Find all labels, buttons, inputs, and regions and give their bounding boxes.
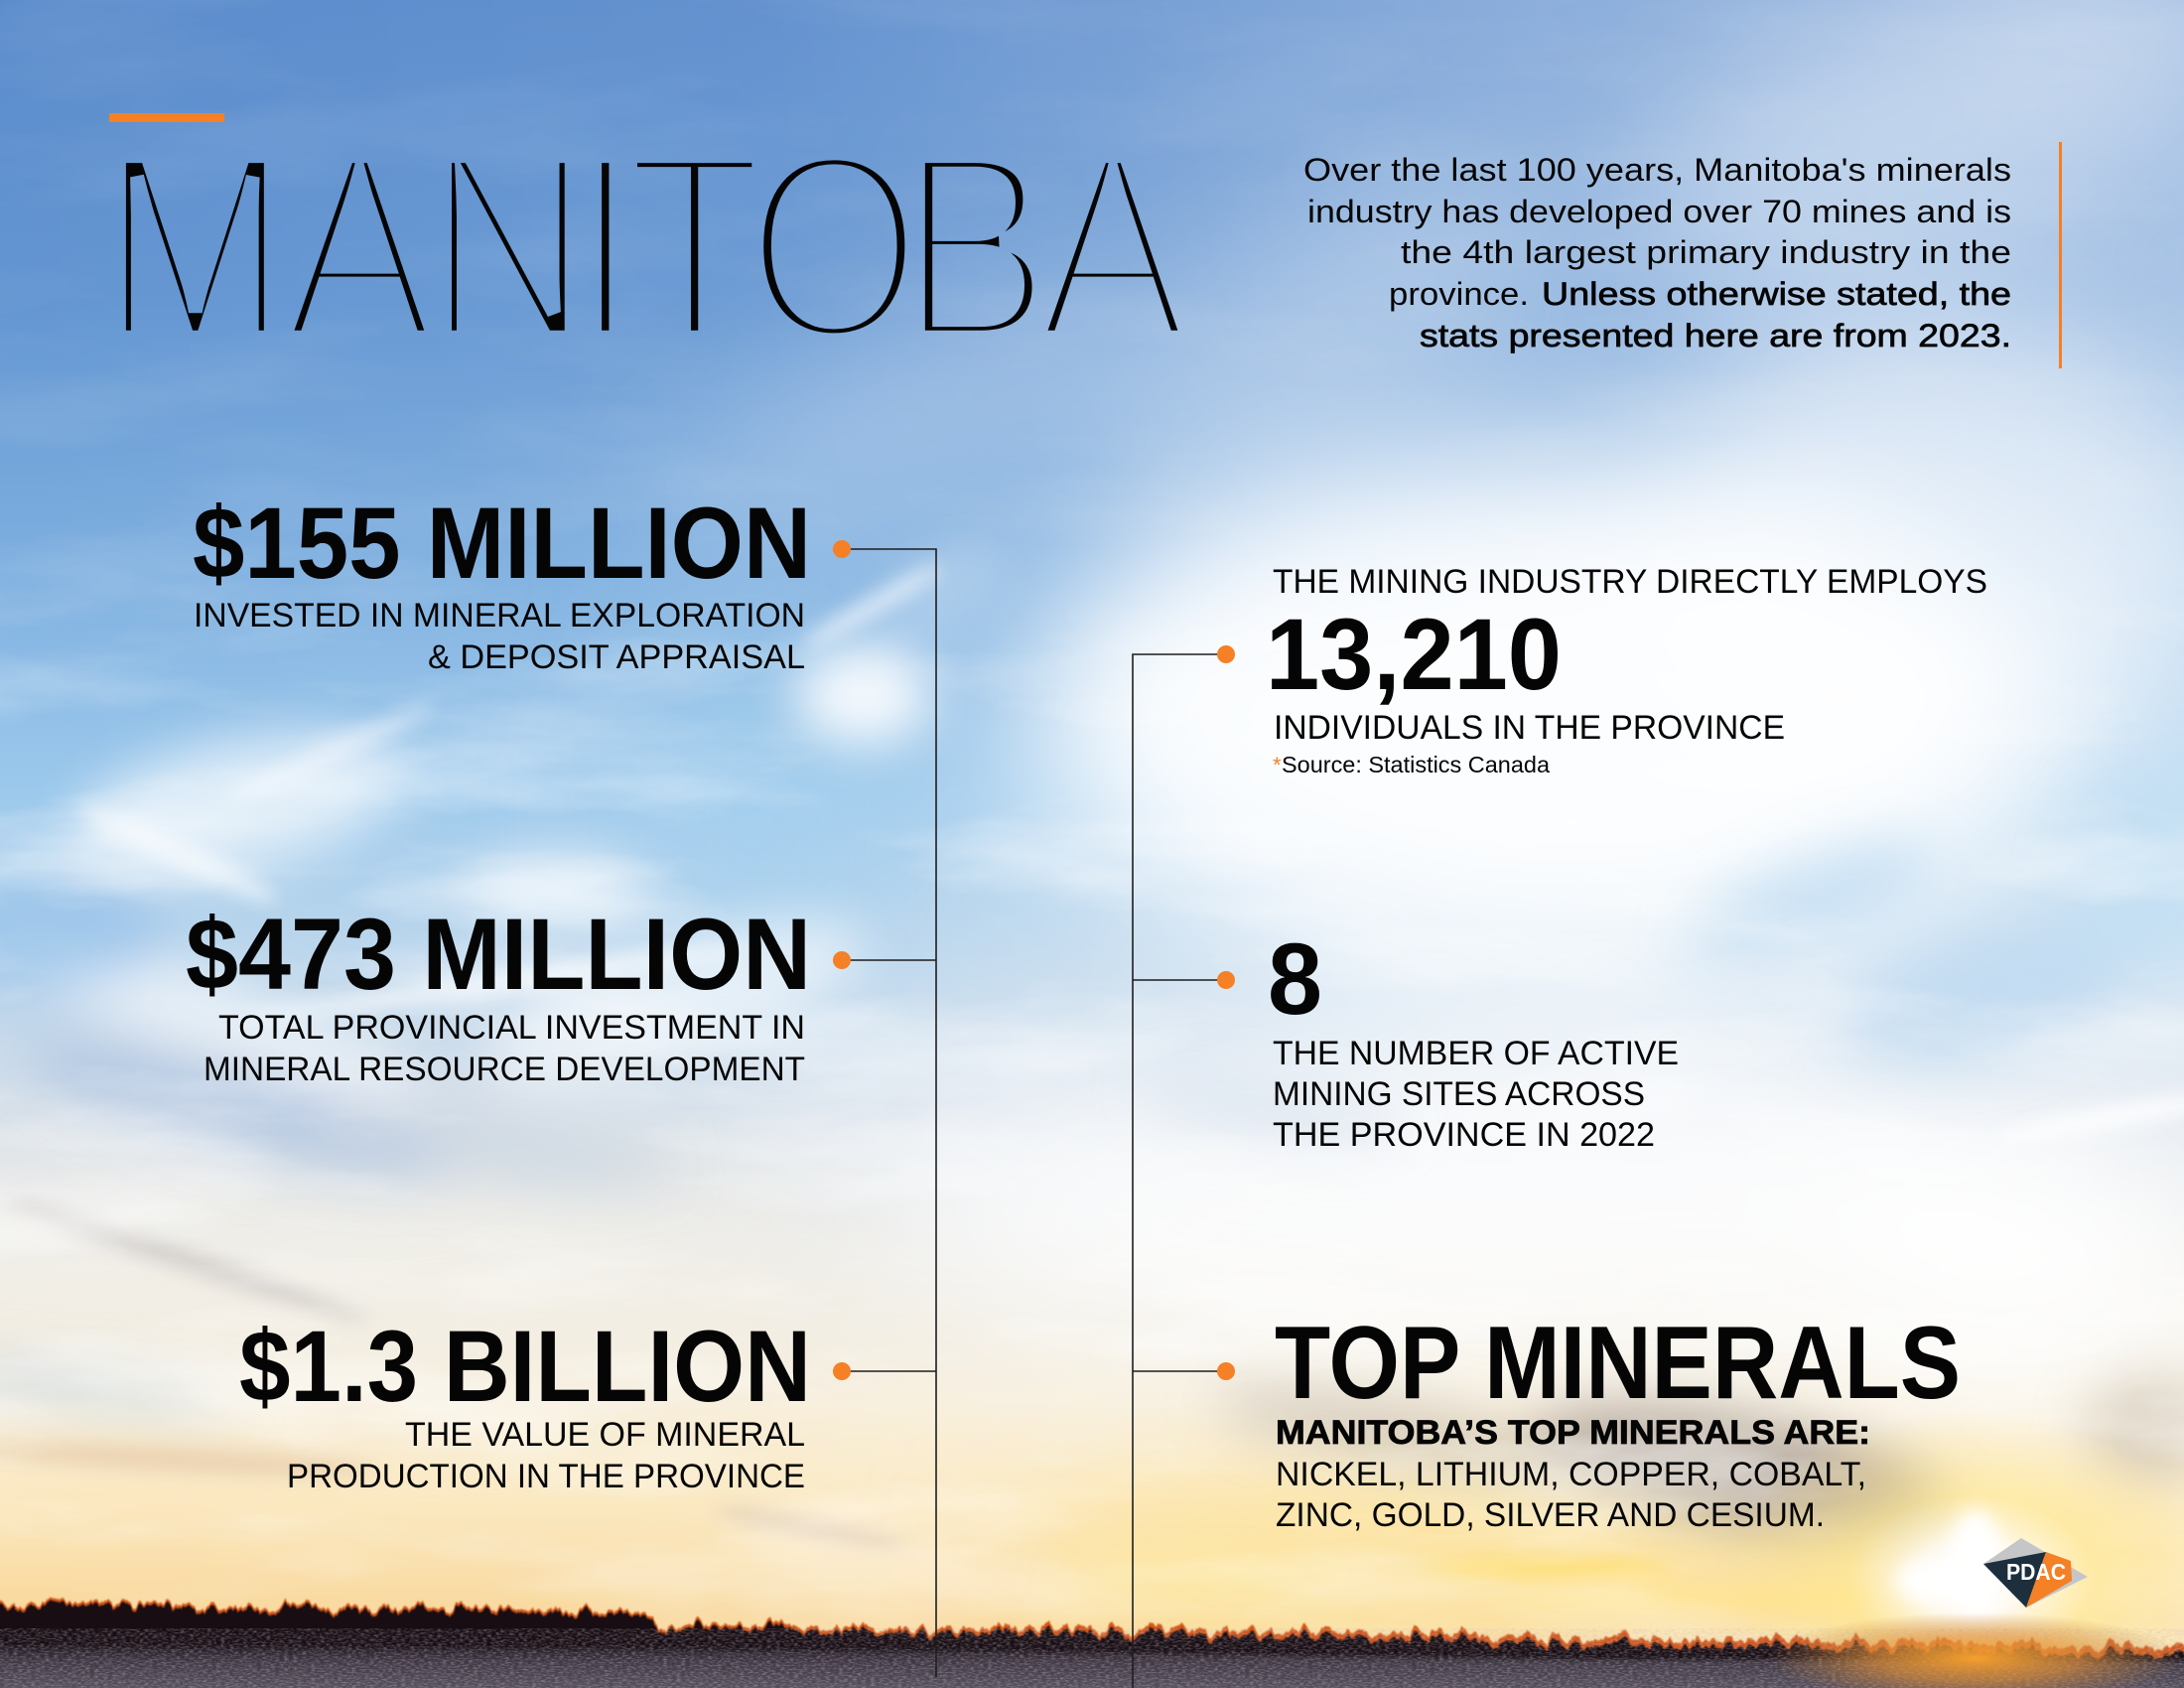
stat: $155 million: $155 MILLION bbox=[193, 487, 811, 600]
orange vertical rule beside intro bbox=[2059, 142, 2062, 368]
stat: $473 million: $473 MILLION bbox=[186, 898, 811, 1011]
icon: orange dot bbox=[833, 540, 851, 558]
intro text block: industry has developed over 70 mines and is bbox=[1307, 194, 2011, 229]
intro text block: province. bbox=[1389, 276, 1529, 312]
icon: orange dot bbox=[833, 1362, 851, 1380]
intro text block bbox=[1303, 152, 2011, 353]
stat: 13,210 individuals: * bbox=[1273, 753, 1282, 777]
stat: 8 active mining sites: MINING SITES ACROSS bbox=[1273, 1075, 1645, 1113]
intro text block: stats presented here are from 2023. bbox=[1420, 318, 2011, 353]
stat: 13,210 individuals bbox=[1217, 563, 1987, 777]
stat: 13,210 individuals: 13,210 bbox=[1266, 598, 1562, 711]
stat: 13,210 individuals: Source: Statistics Canada bbox=[1282, 752, 1550, 777]
stat: top minerals: TOP MINERALS bbox=[1275, 1306, 1961, 1421]
stat: $155 million: INVESTED IN MINERAL EXPLORATION bbox=[194, 597, 805, 634]
stat: $1.3 billion: THE VALUE OF MINERAL bbox=[405, 1416, 805, 1454]
intro text block: Over the last 100 years, Manitoba's minerals bbox=[1303, 152, 2011, 188]
stat: top minerals: MANITOBA’S TOP MINERALS ARE: bbox=[1276, 1414, 1870, 1452]
stat: $1.3 billion bbox=[239, 1310, 851, 1495]
stat: top minerals bbox=[1217, 1306, 1961, 1534]
stat: $1.3 billion: PRODUCTION IN THE PROVINCE bbox=[287, 1458, 805, 1495]
stat: 8 active mining sites: 8 bbox=[1268, 922, 1322, 1036]
stat: $155 million: & DEPOSIT APPRAISAL bbox=[428, 638, 805, 676]
stat: top minerals: ZINC, GOLD, SILVER AND CESIUM. bbox=[1276, 1496, 1825, 1534]
stat: $155 million bbox=[193, 487, 851, 676]
stat: 8 active mining sites: THE NUMBER OF ACTIVE bbox=[1273, 1035, 1679, 1072]
icon: orange dot bbox=[1217, 971, 1235, 989]
stat: top minerals: NICKEL, LITHIUM, COPPER, COBALT, bbox=[1276, 1456, 1866, 1493]
stat: 8 active mining sites: THE PROVINCE IN 2022 bbox=[1273, 1116, 1655, 1154]
orange accent bar above title bbox=[109, 113, 224, 122]
stat: $473 million: TOTAL PROVINCIAL INVESTMENT IN bbox=[218, 1009, 805, 1047]
horizon ground bbox=[0, 1613, 2184, 1688]
icon: orange dot bbox=[1217, 645, 1235, 663]
connector: left timeline bbox=[842, 549, 936, 1677]
icon: PDAC logo: PDAC bbox=[2006, 1559, 2066, 1585]
stat: $1.3 billion: $1.3 BILLION bbox=[239, 1310, 811, 1423]
title: MANITOBA bbox=[100, 96, 1189, 395]
stat: 13,210 individuals: INDIVIDUALS IN THE PROVINCE bbox=[1274, 709, 1785, 747]
stat: $473 million bbox=[186, 898, 851, 1088]
connector: right timeline bbox=[1133, 654, 1226, 1688]
icon: orange dot bbox=[833, 951, 851, 969]
intro text block: the 4th largest primary industry in the bbox=[1401, 234, 2011, 270]
icon: orange dot bbox=[1217, 1362, 1235, 1380]
stat: 13,210 individuals: THE MINING INDUSTRY DIRECTLY EMPLOYS bbox=[1273, 563, 1987, 601]
intro text block: Unless otherwise stated, the bbox=[1542, 276, 2011, 312]
stat: $473 million: MINERAL RESOURCE DEVELOPMENT bbox=[204, 1051, 805, 1088]
stat: 8 active mining sites bbox=[1217, 922, 1679, 1154]
icon: PDAC logo bbox=[1983, 1538, 2088, 1608]
tree line silhouette bbox=[0, 1602, 2184, 1683]
